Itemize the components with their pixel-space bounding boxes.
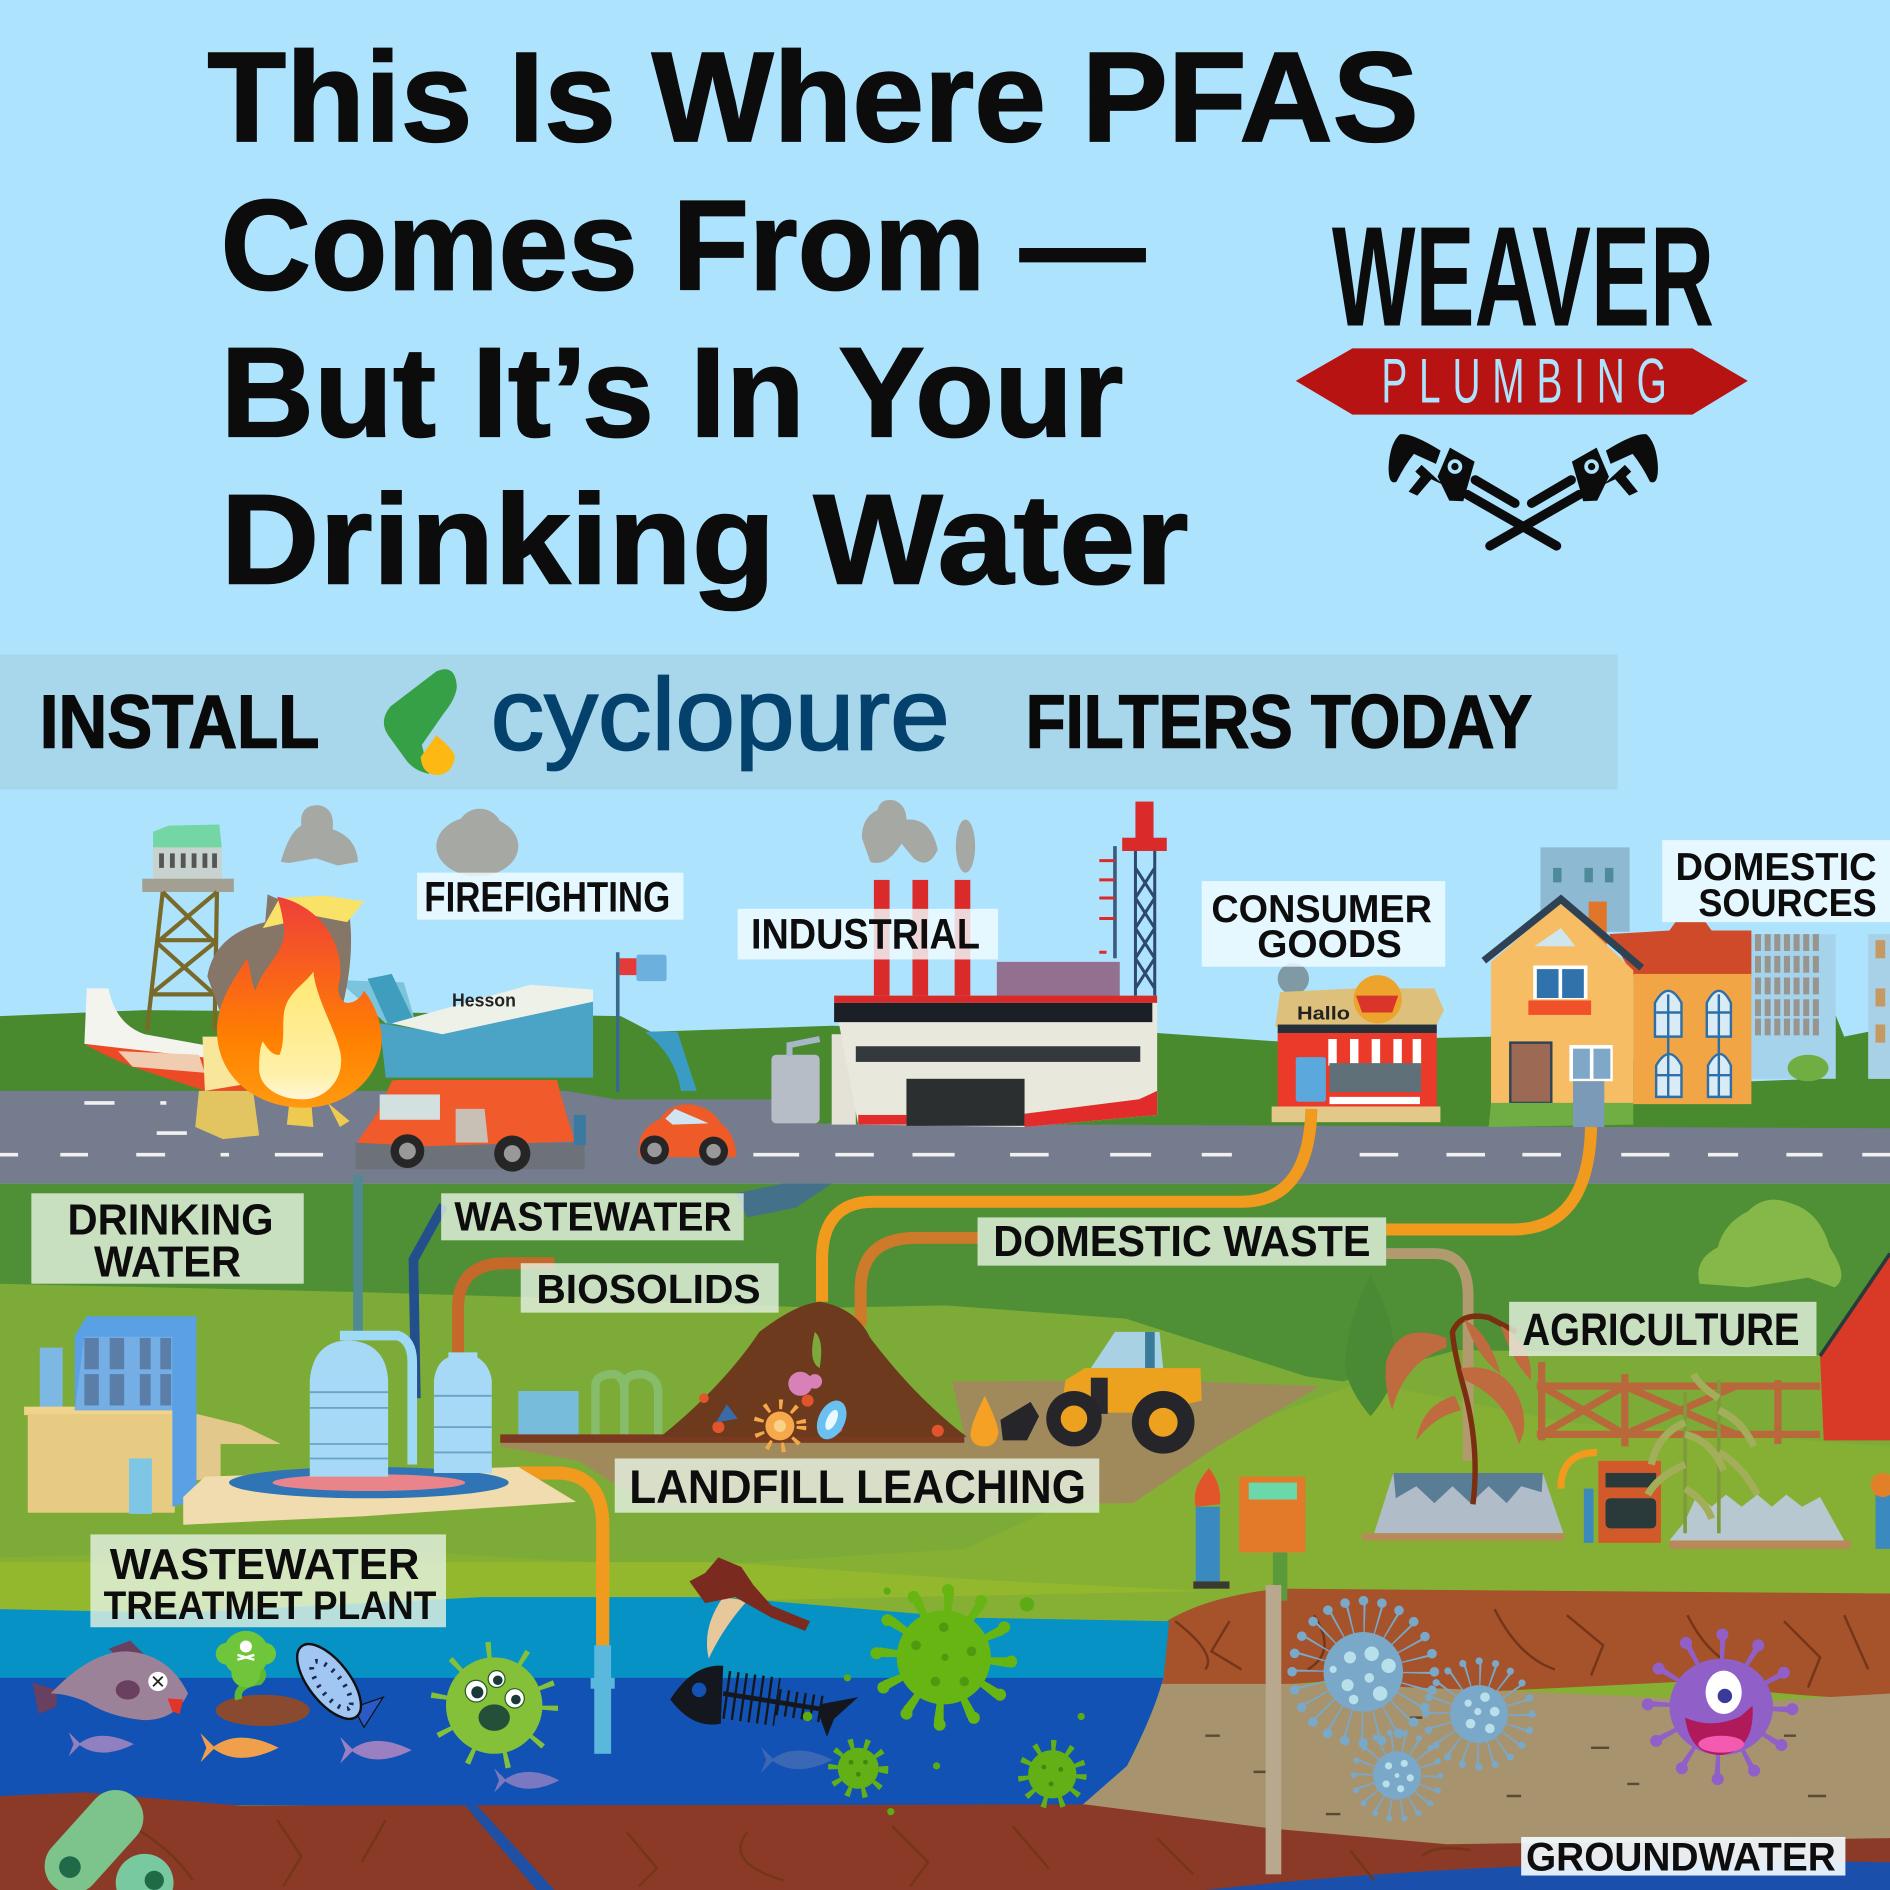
icon: cyclopure leaf [384, 669, 457, 775]
label: consumer goods [1202, 881, 1445, 967]
water filter bed [1362, 1473, 1565, 1540]
smokestacks [874, 880, 970, 996]
label: domestic sources: DOMESTIC [1675, 846, 1877, 889]
banner text: install: INSTALL [40, 679, 319, 763]
airport terminal: Hesson [452, 990, 516, 1010]
blue box and green pipes [518, 1374, 658, 1436]
pipe: domestic waste to agriculture [1386, 1254, 1468, 1461]
banner text: filters today: FILTERS TODAY [1026, 679, 1532, 763]
background buildings [1540, 847, 1890, 1081]
arched windows [1655, 991, 1731, 1097]
windsock flag [616, 952, 697, 1092]
control box and monitoring well [1239, 1477, 1305, 1874]
label: firefighting: FIREFIGHTING [424, 873, 670, 920]
pipe: water intake [354, 1175, 362, 1332]
factory building [832, 996, 1157, 1127]
label: industrial: INDUSTRIAL [751, 911, 980, 958]
title: Comes From — [221, 174, 1145, 317]
small fish [69, 1732, 832, 1792]
second filter bed [1669, 1495, 1850, 1549]
trees [1345, 1200, 1841, 1416]
right earth layers [1073, 1589, 1890, 1847]
orange germ [758, 1404, 802, 1448]
call-to-action banner [0, 655, 1618, 790]
logo red banner: PLUMBING [1381, 347, 1667, 417]
purple annex [997, 962, 1120, 998]
oil drop and rock [970, 1396, 1039, 1446]
standpipe into water [591, 1645, 615, 1754]
toxic poop [216, 1631, 310, 1726]
label: domestic waste: DOMESTIC WASTE [993, 1218, 1370, 1266]
pink germ [788, 1372, 822, 1396]
beige building [24, 1348, 281, 1513]
house [1484, 899, 1751, 1127]
fish skeleton [670, 1666, 858, 1737]
treatment plant [24, 1316, 576, 1525]
logo: Weaver Plumbing [1296, 197, 1748, 546]
basin [229, 1467, 509, 1498]
logo red banner [1296, 347, 1748, 417]
icon: crossed pipe wrenches [1389, 434, 1658, 546]
blue building [75, 1316, 196, 1514]
big green virus [876, 1590, 1011, 1725]
dead fish [33, 1640, 188, 1720]
gray tank [771, 1039, 820, 1123]
label: agriculture: AGRICULTURE [1522, 1304, 1800, 1355]
blue fish [285, 1634, 383, 1729]
label: wastewater treatment plant: TREATMET PLANT [104, 1584, 436, 1628]
label: groundwater: GROUNDWATER [1526, 1836, 1836, 1880]
upper window [1533, 965, 1587, 999]
label: landfill leaching: LANDFILL LEACHING [629, 1460, 1086, 1513]
pipes [358, 1109, 1591, 1649]
label: biosolids: BIOSOLIDS [536, 1266, 761, 1312]
corn plants [1648, 1374, 1757, 1533]
title [207, 26, 1419, 611]
storefront: Hallo [1297, 1004, 1350, 1024]
orange car [639, 1104, 736, 1166]
label: drinking water [31, 1193, 304, 1286]
fence [1537, 1362, 1820, 1446]
icon: flame [202, 894, 382, 1108]
road [0, 1091, 1890, 1184]
dead plant [1386, 1316, 1531, 1504]
airport terminal [338, 974, 593, 1078]
label: drinking water: WATER [94, 1238, 241, 1286]
label: wastewater treatment plant [90, 1534, 446, 1628]
pipe: wastewater inflow [413, 1205, 444, 1398]
farmers [1193, 1468, 1890, 1589]
bulldozer [1046, 1332, 1202, 1454]
label: domestic sources: SOURCES [1698, 882, 1877, 925]
crashed plane [84, 988, 350, 1139]
barn [1820, 1254, 1890, 1440]
label: consumer goods: GOODS [1257, 923, 1402, 966]
pipe: house to domestic waste [1386, 1127, 1591, 1229]
small tank [434, 1352, 492, 1473]
lattice tower [1099, 802, 1167, 996]
coronavirus cluster [1292, 1601, 1532, 1819]
purple monster germ [1648, 1634, 1792, 1779]
landfill tan pad [500, 1380, 1320, 1507]
title: This Is Where PFAS [207, 26, 1419, 169]
distant green hills [0, 1000, 1890, 1157]
lower ground [0, 1184, 1890, 1890]
farm equipment [1561, 1452, 1661, 1543]
title: Drinking Water [221, 468, 1188, 611]
basin platform [183, 1467, 576, 1525]
landfill mound [500, 1302, 967, 1448]
brown dead tree [689, 1557, 810, 1659]
green cartoon germ [439, 1650, 550, 1761]
label: wastewater treatment plant: WASTEWATER [110, 1541, 419, 1589]
label: drinking water: DRINKING [67, 1196, 274, 1244]
storefront [1272, 975, 1444, 1122]
blue germ [811, 1396, 852, 1444]
icon: skull [237, 1640, 254, 1660]
pipe: consumer goods to landfill [822, 1109, 1311, 1302]
pipe: biosolids [458, 1263, 554, 1356]
banner text: cyclopure: cyclopure [491, 657, 950, 772]
pipe: domestic waste to landfill [861, 1238, 979, 1326]
water tower [142, 824, 234, 1031]
title: But It’s In Your [221, 321, 1123, 464]
smoke clouds [281, 800, 1309, 994]
pipe: plant outflow [518, 1473, 603, 1649]
label: domestic sources [1662, 840, 1890, 925]
large tank [310, 1336, 412, 1477]
water body [0, 1597, 1169, 1808]
bacteria [59, 1818, 174, 1890]
label: consumer goods: CONSUMER [1211, 888, 1432, 931]
lower window [1569, 1045, 1613, 1081]
bedrock and deep groundwater [0, 1609, 1890, 1890]
fire truck [356, 1080, 586, 1172]
factory [771, 802, 1167, 1127]
label: wastewater: WASTEWATER [454, 1194, 732, 1240]
small green viruses [803, 1587, 1085, 1815]
